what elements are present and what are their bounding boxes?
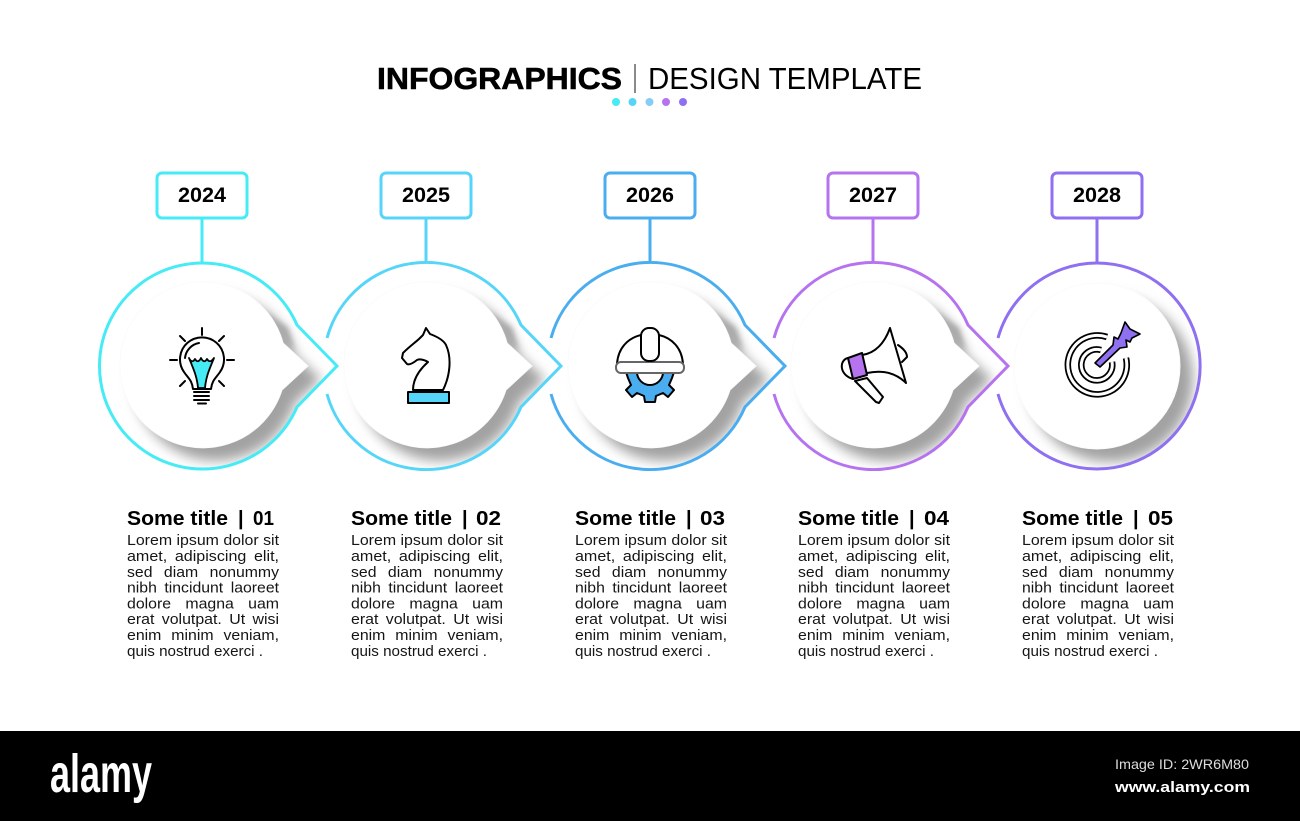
shadow: [133, 295, 321, 461]
text block: 05: sed diam nonummy: [1022, 564, 1175, 581]
step 3: 2026: [551, 173, 785, 470]
text block: 03: nibh tincidunt laoreet: [575, 580, 728, 596]
text block: 02: erat volutpat. Ut wisi: [351, 611, 503, 628]
text block: 04: [798, 508, 951, 660]
text block: 05: erat volutpat. Ut wisi: [1022, 611, 1174, 628]
text block: 04: enim minim veniam,: [798, 627, 950, 644]
text block: 01: sed diam nonummy: [127, 564, 280, 581]
step 5: 2028: [998, 173, 1200, 469]
ring with arrow tip: [100, 263, 337, 469]
text block: 03: dolore magna uam: [575, 596, 727, 612]
text block: 01: dolore magna uam: [127, 596, 279, 612]
footer bar: alamy: [50, 744, 152, 804]
icon: chess knight: [402, 328, 450, 403]
text block: 05: Lorem ipsum dolor sit: [1022, 532, 1175, 549]
text block: 05: |: [1133, 508, 1139, 530]
year box: 2024: [178, 184, 226, 207]
text block: 04: 04: [924, 508, 950, 530]
title: INFOGRAPHICS: [377, 61, 622, 96]
ring with arrow tip: [551, 262, 785, 470]
ring with arrow tip: [774, 262, 1008, 470]
text block: 02: nibh tincidunt laoreet: [351, 580, 504, 596]
inner disc: [1014, 283, 1180, 449]
icon: megaphone: [842, 328, 907, 403]
arrow fill: [551, 262, 785, 470]
year box: [828, 173, 918, 218]
shadow: [357, 295, 545, 461]
text block: 03: Some title: [575, 508, 676, 530]
year box: 2025: [402, 184, 450, 207]
text block: 04: Lorem ipsum dolor sit: [798, 532, 951, 549]
text block: 01: quis nostrud exerci .: [127, 643, 263, 660]
text block: 02: sed diam nonummy: [351, 564, 504, 581]
text block: 01: 01: [253, 508, 274, 530]
text block: 03: enim minim veniam,: [575, 627, 727, 644]
text block: 02: enim minim veniam,: [351, 627, 503, 644]
text block: 02: Lorem ipsum dolor sit: [351, 532, 504, 549]
text block: 03: Lorem ipsum dolor sit: [575, 532, 728, 549]
step 1: 2024: [100, 173, 337, 469]
text block: 05: quis nostrud exerci .: [1022, 643, 1158, 660]
text block: 01: amet, adipiscing elit,: [127, 548, 279, 565]
text block: 01: Lorem ipsum dolor sit: [127, 532, 280, 549]
step 2: 2025: [327, 173, 561, 470]
inner disc: [120, 282, 308, 448]
arrow fill: [100, 263, 337, 469]
text block: 03: 03: [700, 508, 725, 530]
year box: [381, 173, 471, 218]
text block: 02: dolore magna uam: [351, 596, 503, 612]
icon: target: [1068, 322, 1140, 394]
text block: 04: dolore magna uam: [798, 596, 950, 612]
year box: 2027: [849, 184, 897, 207]
text block: 02: Some title: [351, 508, 452, 530]
text block: 02: [351, 508, 504, 660]
text block: 01: enim minim veniam,: [127, 627, 279, 644]
ring with arrow tip: [327, 262, 561, 470]
footer bar: [0, 731, 1300, 821]
connector line: [1096, 218, 1098, 263]
year box: [157, 173, 247, 218]
inner disc: [791, 282, 979, 448]
text block: 05: dolore magna uam: [1022, 596, 1174, 612]
connector line: [424, 218, 428, 263]
text block: 02: quis nostrud exerci .: [351, 643, 487, 660]
text block: 05: 05: [1148, 508, 1173, 530]
text block: 03: quis nostrud exerci .: [575, 643, 711, 660]
title dots: [612, 98, 687, 106]
text block: 02: amet, adipiscing elit,: [351, 548, 503, 565]
text block: 01: |: [238, 508, 244, 530]
year box: 2028: [1073, 184, 1121, 207]
text block: 01: [127, 508, 280, 660]
text block: 03: [575, 508, 728, 660]
text block: 03: |: [686, 508, 692, 530]
text block: 04: sed diam nonummy: [798, 564, 951, 581]
text block: 03: amet, adipiscing elit,: [575, 548, 727, 565]
icon: light bulb: [170, 328, 234, 404]
year box: [1052, 173, 1142, 218]
text block: 04: quis nostrud exerci .: [798, 643, 934, 660]
text block: 04: erat volutpat. Ut wisi: [798, 611, 950, 628]
shadow: [804, 295, 992, 461]
text block: 05: Some title: [1022, 508, 1123, 530]
inner disc: [344, 282, 532, 448]
ring: [998, 263, 1200, 469]
shadow: [581, 295, 769, 461]
arrow fill: [327, 262, 561, 470]
text block: 04: nibh tincidunt laoreet: [798, 580, 951, 596]
shadow: [1027, 296, 1193, 462]
footer bar: www.alamy.com: [1114, 779, 1250, 796]
year box: 2026: [626, 184, 674, 207]
step 4: 2027: [774, 173, 1008, 470]
year box: [605, 173, 695, 218]
text block: 04: |: [909, 508, 915, 530]
text block: 05: [1022, 508, 1175, 660]
connector line: [872, 218, 874, 263]
text block: 05: amet, adipiscing elit,: [1022, 548, 1174, 565]
text block: 01: nibh tincidunt laoreet: [127, 580, 280, 596]
text block: 01: Some title: [127, 508, 228, 530]
text block: 02: |: [462, 508, 468, 530]
arrow fill: [774, 262, 1008, 470]
connector line: [648, 218, 652, 263]
text block: 02: 02: [476, 508, 501, 530]
connector line: [200, 218, 204, 263]
inner disc: [568, 282, 756, 448]
title: DESIGN TEMPLATE: [648, 61, 922, 96]
text block: 03: erat volutpat. Ut wisi: [575, 611, 727, 628]
text block: 04: Some title: [798, 508, 899, 530]
text block: 05: nibh tincidunt laoreet: [1022, 580, 1175, 596]
text block: 04: amet, adipiscing elit,: [798, 548, 950, 565]
text block: 05: enim minim veniam,: [1022, 627, 1174, 644]
title: [377, 61, 922, 96]
footer bar: Image ID: 2WR6M80: [1115, 756, 1249, 772]
icon: helmet and gear: [616, 328, 684, 402]
text block: 01: erat volutpat. Ut wisi: [127, 611, 279, 628]
text block: 03: sed diam nonummy: [575, 564, 728, 581]
